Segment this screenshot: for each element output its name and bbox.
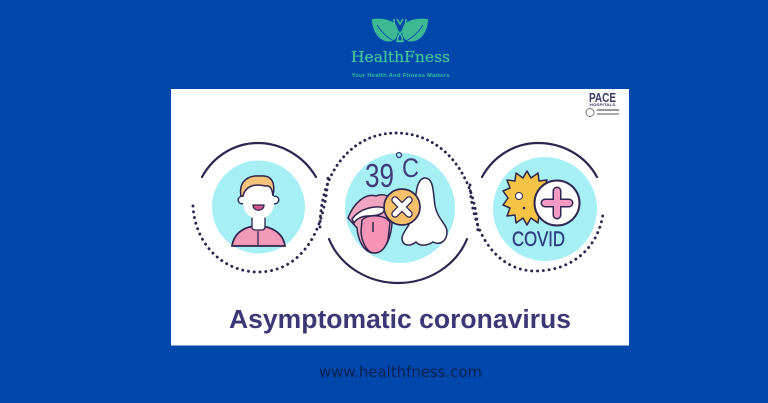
icon: nose — [402, 178, 447, 245]
panel: white image — [171, 89, 629, 346]
panel: covid test — [470, 143, 603, 271]
icon: plus badge — [534, 180, 580, 226]
publisher mark: PACE — [589, 90, 616, 105]
icon: person — [232, 176, 285, 246]
temperature reading: C — [402, 153, 419, 183]
title: Asymptomatic coronavirus — [229, 306, 571, 334]
publisher mark: HOSPITALS — [590, 103, 616, 107]
icon: leaves — [372, 19, 428, 42]
brand logo — [351, 19, 450, 79]
icon: tongue and mouth — [348, 195, 393, 253]
temperature reading: 39 — [365, 157, 394, 194]
label: COVID: COVID — [512, 228, 565, 251]
temperature reading — [365, 152, 419, 194]
panel: person without symptoms — [193, 143, 328, 272]
icon: virus — [503, 171, 552, 225]
brand tagline: Your Health And Fitness Matters — [352, 73, 450, 79]
brand name: HealthFness — [351, 48, 450, 66]
website address: www.healthfness.com — [319, 363, 482, 381]
panel: lost taste and smell — [320, 133, 478, 283]
publisher mark — [586, 90, 619, 116]
icon: cross badge — [384, 189, 420, 225]
